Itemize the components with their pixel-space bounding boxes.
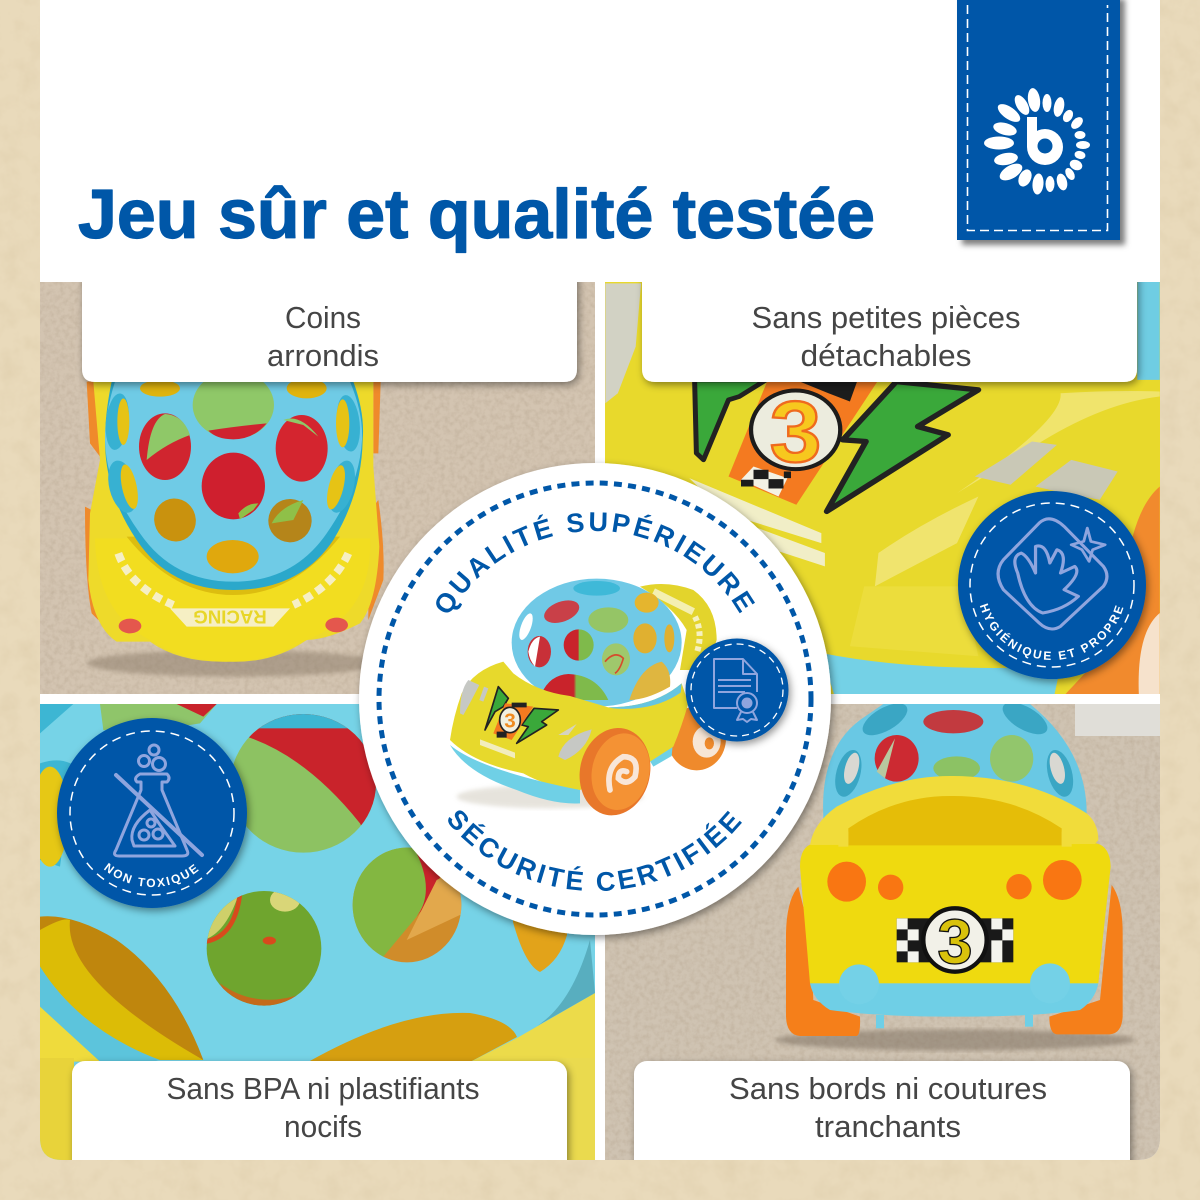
caption: Sans petites pièces détachables: [642, 262, 1137, 382]
curved heading bottom: SÉCURITÉ CERTIFIÉE: [448, 810, 742, 891]
icon: brand sunflower logo: [984, 87, 1090, 195]
title: Jeu sûr et qualité testée: [78, 175, 875, 253]
panel: photo bottom right: [605, 696, 1160, 1160]
caption: Sans BPA ni plastifiants nocifs: nocifs: [284, 1109, 362, 1144]
toy car illustration: [450, 579, 726, 822]
macro view of the car hood with decal: [605, 280, 1160, 700]
caption: Coins arrondis: arrondis: [267, 338, 379, 373]
badge label: HYGIÉNIQUE ET PROPRE: [980, 603, 1124, 660]
caption: Sans bords ni coutures tranchants: Sans bords ni coutures: [729, 1071, 1047, 1106]
badge: non toxique: [54, 716, 254, 916]
white header panel: [40, 0, 1160, 282]
macro view of the ball holes: [32, 704, 463, 1063]
caption: Sans BPA ni plastifiants nocifs: [72, 1061, 567, 1173]
caption: Sans petites pièces détachables: détachables: [800, 338, 972, 373]
caption: Coins arrondis: [82, 262, 577, 382]
toy car seen from the front: RACING: [193, 607, 267, 628]
icon: hand on wipe: [998, 519, 1107, 629]
toy car seen from the front: [85, 371, 384, 677]
badge label: NON TOXIQUE: [104, 862, 199, 888]
central seal: qualité supérieure / sécurité certifiée: [356, 460, 838, 944]
toy car illustration: 3: [504, 709, 516, 732]
caption: Sans BPA ni plastifiants nocifs: Sans BPA ni plastifiants: [166, 1071, 480, 1106]
panel: photo top right: [605, 280, 1160, 700]
toy car seen from the rear: 3: [937, 907, 973, 977]
brand tag with logo: [957, 0, 1120, 240]
caption: Sans bords ni coutures tranchants: tranchants: [815, 1109, 961, 1144]
macro view of the car hood with decal: 3: [770, 384, 821, 481]
panel: photo top left: [40, 282, 595, 694]
badge: hygiénique et propre: [955, 489, 1154, 687]
caption: Sans bords ni coutures tranchants: [634, 1061, 1130, 1173]
panel: photo bottom left: [32, 704, 595, 1160]
icon: certificate document: [714, 659, 757, 722]
caption: Sans petites pièces détachables: Sans petites pièces: [752, 300, 1020, 335]
curved heading top: QUALITÉ SUPÉRIEURE: [436, 512, 755, 614]
caption: Coins arrondis: Coins: [285, 300, 361, 335]
certificate badge: [686, 638, 788, 742]
toy car seen from the rear: [775, 696, 1135, 1051]
icon: crossed-out flask: [115, 745, 202, 856]
